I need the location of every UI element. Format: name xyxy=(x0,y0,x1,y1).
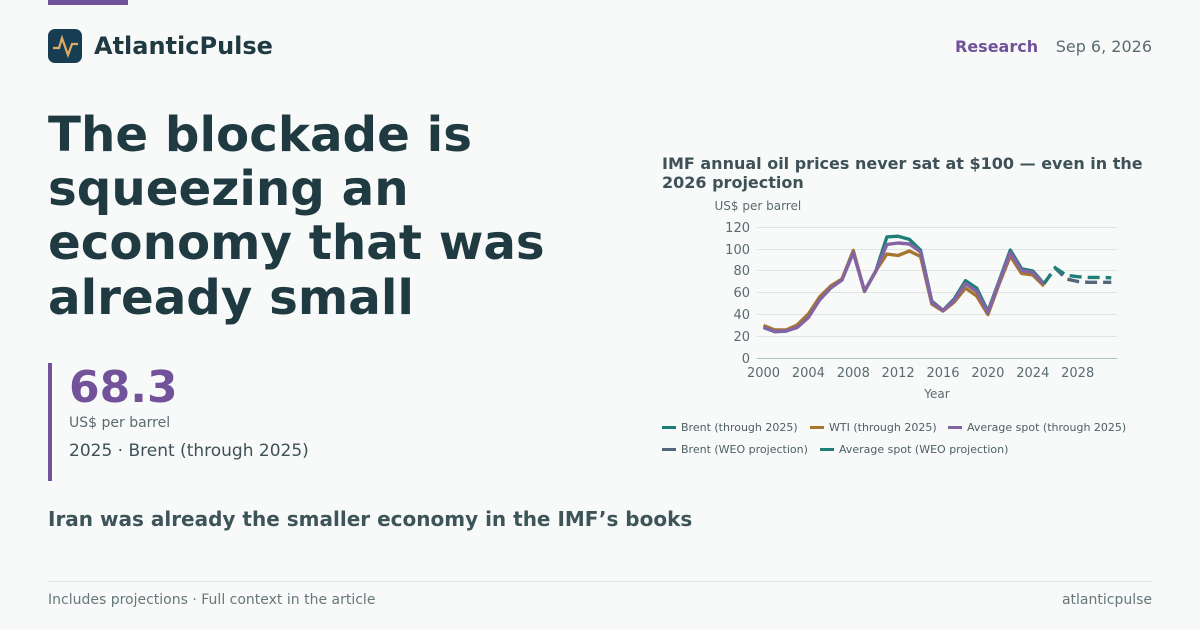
footer note: Includes projections · Full context in the article xyxy=(48,592,375,608)
legend: Brent projection: Brent (WEO projection) xyxy=(681,443,808,456)
series: Brent WEO projection xyxy=(1044,268,1111,284)
stat callout xyxy=(48,362,309,481)
x axis labels: 2004 xyxy=(792,366,825,381)
legend xyxy=(662,421,1126,456)
series: average spot xyxy=(764,243,1044,332)
footer rule xyxy=(48,581,1152,582)
x axis labels: 2024 xyxy=(1016,366,1049,381)
stat description: 2025 · Brent (through 2025) xyxy=(69,441,309,461)
chart title: IMF annual oil prices never sat at $100 — even in the xyxy=(662,154,1143,173)
brand name: AtlanticPulse xyxy=(94,32,273,60)
x axis labels xyxy=(747,366,1094,381)
stat value: 68.3 xyxy=(69,362,178,413)
accent bar xyxy=(48,0,128,5)
x axis labels: 2016 xyxy=(926,366,960,381)
title: squeezing an xyxy=(48,161,409,217)
footer brand: atlanticpulse xyxy=(1062,592,1152,608)
icon: pulse logo xyxy=(48,29,82,63)
y axis labels: 80 xyxy=(733,264,750,279)
y axis labels: 0 xyxy=(742,352,750,367)
y axis labels: 20 xyxy=(733,330,750,345)
title: economy that was xyxy=(48,215,545,271)
date: Sep 6, 2026 xyxy=(1056,37,1152,56)
y axis title: US$ per barrel xyxy=(714,199,801,213)
x axis labels: 2000 xyxy=(747,366,780,381)
line chart xyxy=(714,199,1117,401)
series: Average spot WEO projection xyxy=(1044,268,1111,284)
y axis labels xyxy=(725,221,750,367)
y axis labels: 60 xyxy=(733,286,750,301)
legend: Average spot projection: Average spot (WEO projection) xyxy=(839,443,1008,456)
legend: Average spot: Average spot (through 2025) xyxy=(967,421,1126,434)
subheading: Iran was already the smaller economy in the IMF’s books xyxy=(48,507,692,531)
chart title xyxy=(662,154,1143,192)
x axis labels: 2028 xyxy=(1061,366,1094,381)
title: The blockade is xyxy=(48,106,472,162)
chart title: 2026 projection xyxy=(662,172,804,192)
section label: Research xyxy=(955,37,1038,56)
y axis labels: 120 xyxy=(725,221,750,236)
x axis labels: 2012 xyxy=(882,366,915,381)
stat unit: US$ per barrel xyxy=(69,415,170,431)
x axis labels: 2008 xyxy=(837,366,870,381)
legend: WTI: WTI (through 2025) xyxy=(829,421,937,434)
y axis labels: 100 xyxy=(725,243,750,258)
x axis labels: 2020 xyxy=(971,366,1004,381)
legend: Brent through 2025: Brent (through 2025) xyxy=(681,421,798,434)
title: already small xyxy=(48,270,414,326)
x axis title: Year xyxy=(923,387,950,401)
y axis labels: 40 xyxy=(733,308,750,323)
series: WTI xyxy=(764,250,1044,330)
title xyxy=(48,106,545,326)
stat accent rule xyxy=(48,363,52,481)
series: Brent xyxy=(764,236,1044,332)
